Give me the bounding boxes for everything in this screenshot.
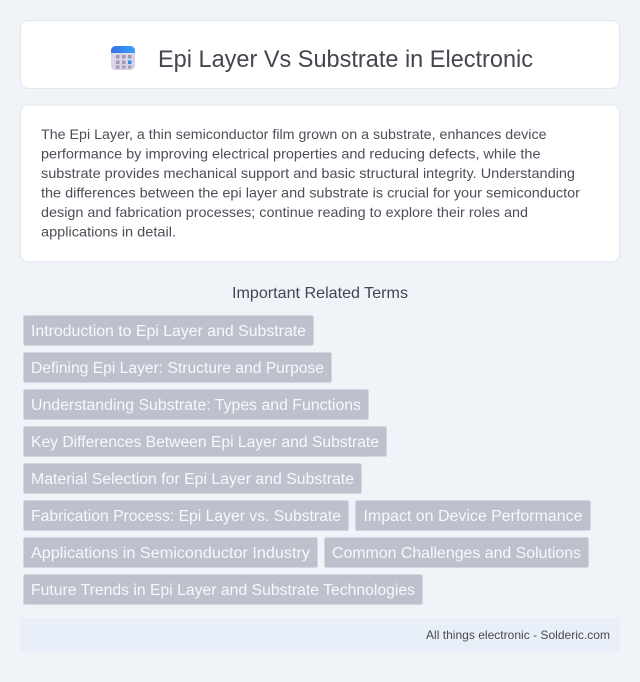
related terms tags bbox=[24, 316, 590, 604]
tag: defining epi layer bbox=[24, 352, 332, 382]
tag: future trends: Future Trends in Epi Layer and Substrate Technologies bbox=[31, 582, 415, 599]
intro text block: substrate provides mechanical support and basic structural integrity. Understanding bbox=[41, 165, 575, 181]
tag: defining epi layer: Defining Epi Layer: Structure and Purpose bbox=[31, 360, 324, 377]
tag: common challenges bbox=[324, 538, 588, 568]
tag: introduction bbox=[24, 316, 314, 346]
panel: introduction bbox=[20, 105, 620, 262]
tag: introduction: Introduction to Epi Layer and Substrate bbox=[31, 323, 306, 340]
tag: key differences bbox=[24, 426, 386, 456]
tag: applications: Applications in Semiconductor Industry bbox=[31, 545, 310, 562]
title: Epi Layer Vs Substrate in Electronic bbox=[158, 46, 533, 73]
intro text block: the differences between the epi layer and substrate is crucial for your semiconductor bbox=[41, 184, 580, 200]
tag: material selection bbox=[24, 464, 362, 494]
footer: All things electronic - Solderic.com bbox=[426, 628, 610, 642]
tag: common challenges: Common Challenges and Solutions bbox=[332, 545, 581, 562]
intro text block: performance by improving electrical properties and reducing defects, while the bbox=[41, 146, 541, 162]
tag: material selection: Material Selection for Epi Layer and Substrate bbox=[31, 471, 354, 488]
intro text block: The Epi Layer, a thin semiconductor film grown on a substrate, enhances device bbox=[41, 126, 547, 142]
footer bbox=[20, 618, 620, 652]
tag: understanding substrate bbox=[24, 390, 368, 420]
tag: applications bbox=[24, 538, 318, 568]
intro text block: applications in detail. bbox=[41, 224, 176, 240]
tag: impact on device performance: Impact on Device Performance bbox=[364, 508, 582, 525]
tag: fabrication process: Fabrication Process: Epi Layer vs. Substrate bbox=[31, 508, 341, 525]
tag: future trends bbox=[24, 574, 422, 604]
tag: impact on device performance bbox=[356, 500, 590, 530]
tag: understanding substrate: Understanding Substrate: Types and Functions bbox=[31, 397, 361, 414]
icon: calendar grid bbox=[111, 46, 135, 70]
header panel bbox=[20, 20, 620, 88]
tag: key differences: Key Differences Between Epi Layer and Substrate bbox=[31, 434, 379, 451]
intro text block bbox=[41, 126, 580, 240]
section heading: Important Related Terms bbox=[232, 285, 408, 302]
intro text block: design and fabrication processes; continue reading to explore their roles and bbox=[41, 204, 528, 220]
tag: fabrication process bbox=[24, 500, 348, 530]
